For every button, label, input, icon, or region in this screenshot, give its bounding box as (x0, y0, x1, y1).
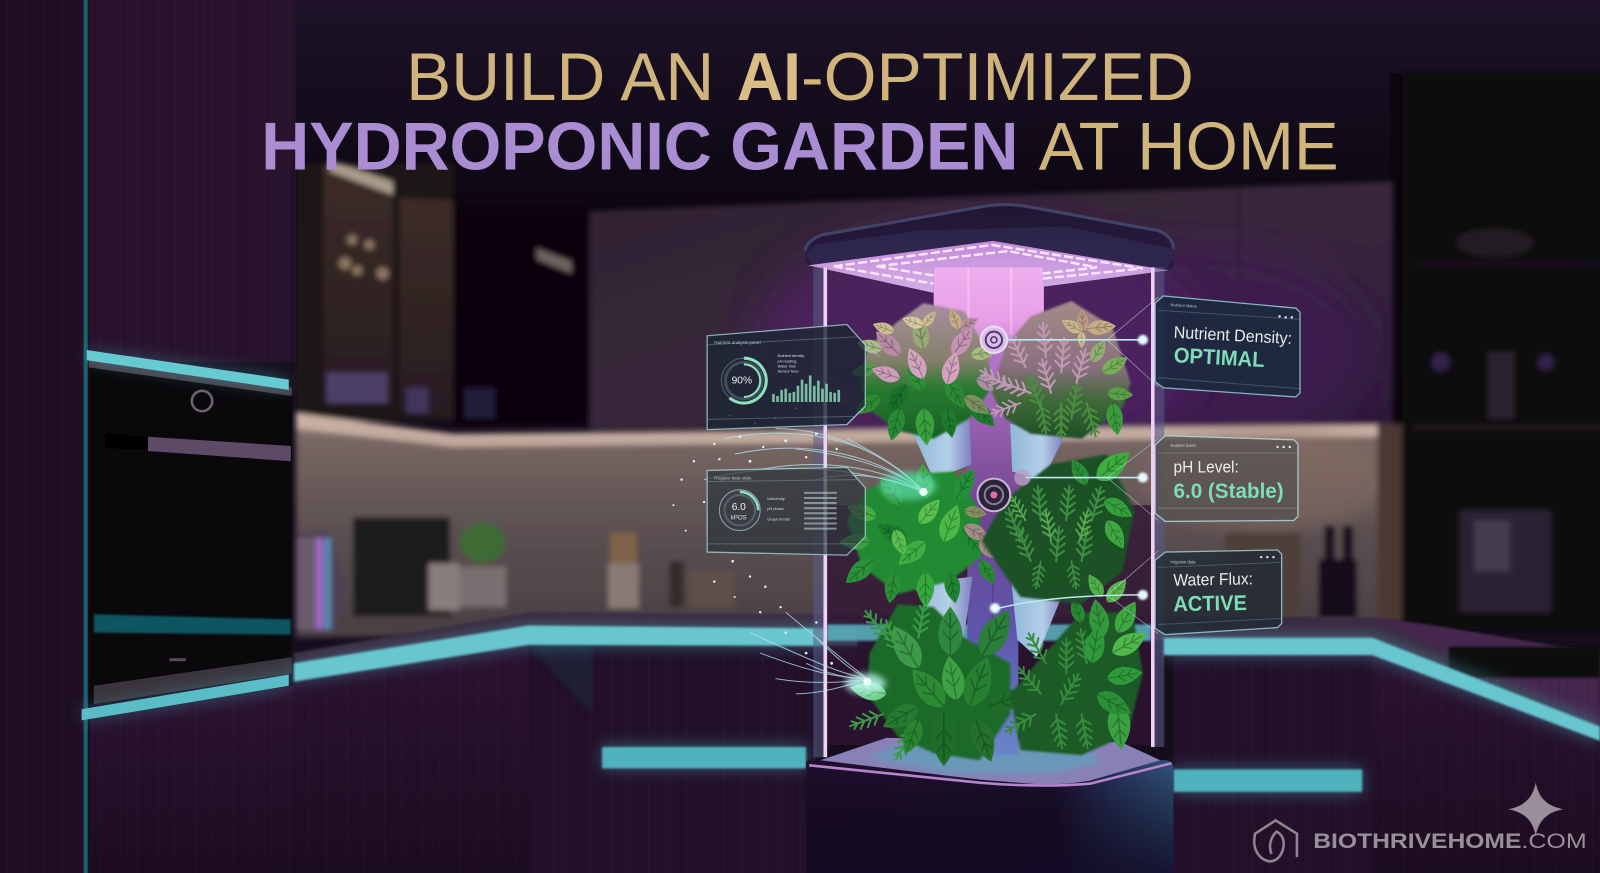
left HUD panel: nutrient analysis: Nutrient density (778, 353, 804, 358)
backsplash (296, 413, 1380, 638)
watermark: BioThriveHome logo (1254, 783, 1587, 861)
right HUD panel: pH level: pH Level: (1173, 457, 1239, 476)
plant: middle left basil (839, 463, 1000, 608)
sensor rings (978, 327, 1031, 511)
title: AI (737, 40, 801, 115)
left HUD panel: pH gauge: Graph trends (767, 516, 790, 521)
icon: sparkle (1508, 783, 1563, 836)
plant: bottom left big basil (848, 602, 1030, 766)
watermark: BioThriveHome logo: .COM (1521, 829, 1587, 853)
left HUD panel: nutrient analysis: Nutrient analysis panel (714, 340, 761, 345)
tower base (806, 738, 1173, 873)
plant: top right herbs (977, 301, 1134, 439)
counter strip through glass (827, 625, 1151, 641)
blurred far wall (296, 73, 1600, 638)
right HUD panel: nutrient density: OPTIMAL (1173, 343, 1265, 372)
tower top cap (805, 205, 1173, 293)
left HUD panel: pH gauge: Regular data stats (714, 476, 752, 481)
upper glass cabinets (296, 160, 588, 426)
right HUD panel: water flux (1155, 550, 1282, 635)
right HUD panel: water flux: ACTIVE (1173, 591, 1247, 616)
connector lines (995, 297, 1158, 634)
central column (934, 263, 1044, 755)
title (261, 40, 1339, 184)
right HUD panel: water flux: Water Flux: (1173, 569, 1253, 590)
left HUD panel: nutrient analysis (707, 325, 880, 430)
lower cabinets (90, 643, 1600, 873)
counter appliances and objects (296, 517, 1357, 631)
connector nodes (990, 335, 1148, 613)
right HUD panel: nutrient density (1155, 296, 1300, 397)
pots (913, 416, 1063, 657)
right HUD panel: nutrient density: Nutrient status (1170, 302, 1197, 309)
left tall cabinet panels (0, 0, 296, 873)
data rows (804, 493, 837, 529)
gauge 90%: 90% (732, 376, 752, 387)
right HUD panel: pH level: Nutrient levels (1170, 443, 1196, 448)
right HUD panel: pH level: 6.0 (Stable) (1173, 479, 1284, 503)
under-cabinet light (296, 413, 1378, 447)
wordmark: BIOTHRIVEHOME (1313, 829, 1521, 853)
title: -OPTIMIZED (801, 40, 1194, 115)
plant: middle right rosemary (982, 444, 1136, 607)
gauge 6.0 (719, 490, 760, 531)
icon: house with leaf (1254, 820, 1297, 861)
gauge 90% (721, 358, 766, 403)
gauge 6.0: kPOS (731, 514, 747, 521)
right HUD panel: nutrient density: Nutrient Density: (1173, 323, 1292, 348)
right tall cabinet (1402, 73, 1600, 630)
left HUD panel: nutrient analysis: Sensor feed (778, 368, 798, 373)
bar chart (773, 376, 839, 402)
left HUD panel: nutrient analysis: pH reading (778, 358, 796, 363)
tower: hydroponic garden unit (805, 205, 1173, 873)
cyan LED strips (82, 350, 1600, 794)
plant: bottom right mixed herbs (1002, 596, 1151, 755)
left HUD panel: nutrient analysis: Water flow (778, 363, 796, 368)
glass posts (813, 267, 1164, 757)
ceiling (291, 0, 1600, 225)
left HUD panel: pH gauge: pH phase (767, 506, 784, 511)
glass interior tint (827, 505, 1151, 745)
water and data particle streams (672, 407, 996, 694)
left HUD panel: pH gauge (707, 467, 865, 555)
oven (89, 359, 292, 704)
plant: top left basil (849, 303, 1007, 446)
title: AT HOME (1039, 109, 1339, 184)
LED grow light panel (808, 241, 1168, 293)
gauge 6.0: 6.0 (732, 502, 746, 513)
right cabinet backing (1390, 73, 1600, 630)
kitchen counter (294, 612, 1600, 727)
upper wall cabinets (590, 182, 1393, 469)
title: HYDROPONIC GARDEN (261, 109, 1018, 184)
left HUD panel: pH gauge: Uniformity (767, 496, 785, 501)
right HUD panel: pH level (1155, 436, 1298, 521)
right HUD panel: water flux: Irrigation data (1170, 559, 1196, 564)
title: BUILD AN (406, 40, 714, 115)
